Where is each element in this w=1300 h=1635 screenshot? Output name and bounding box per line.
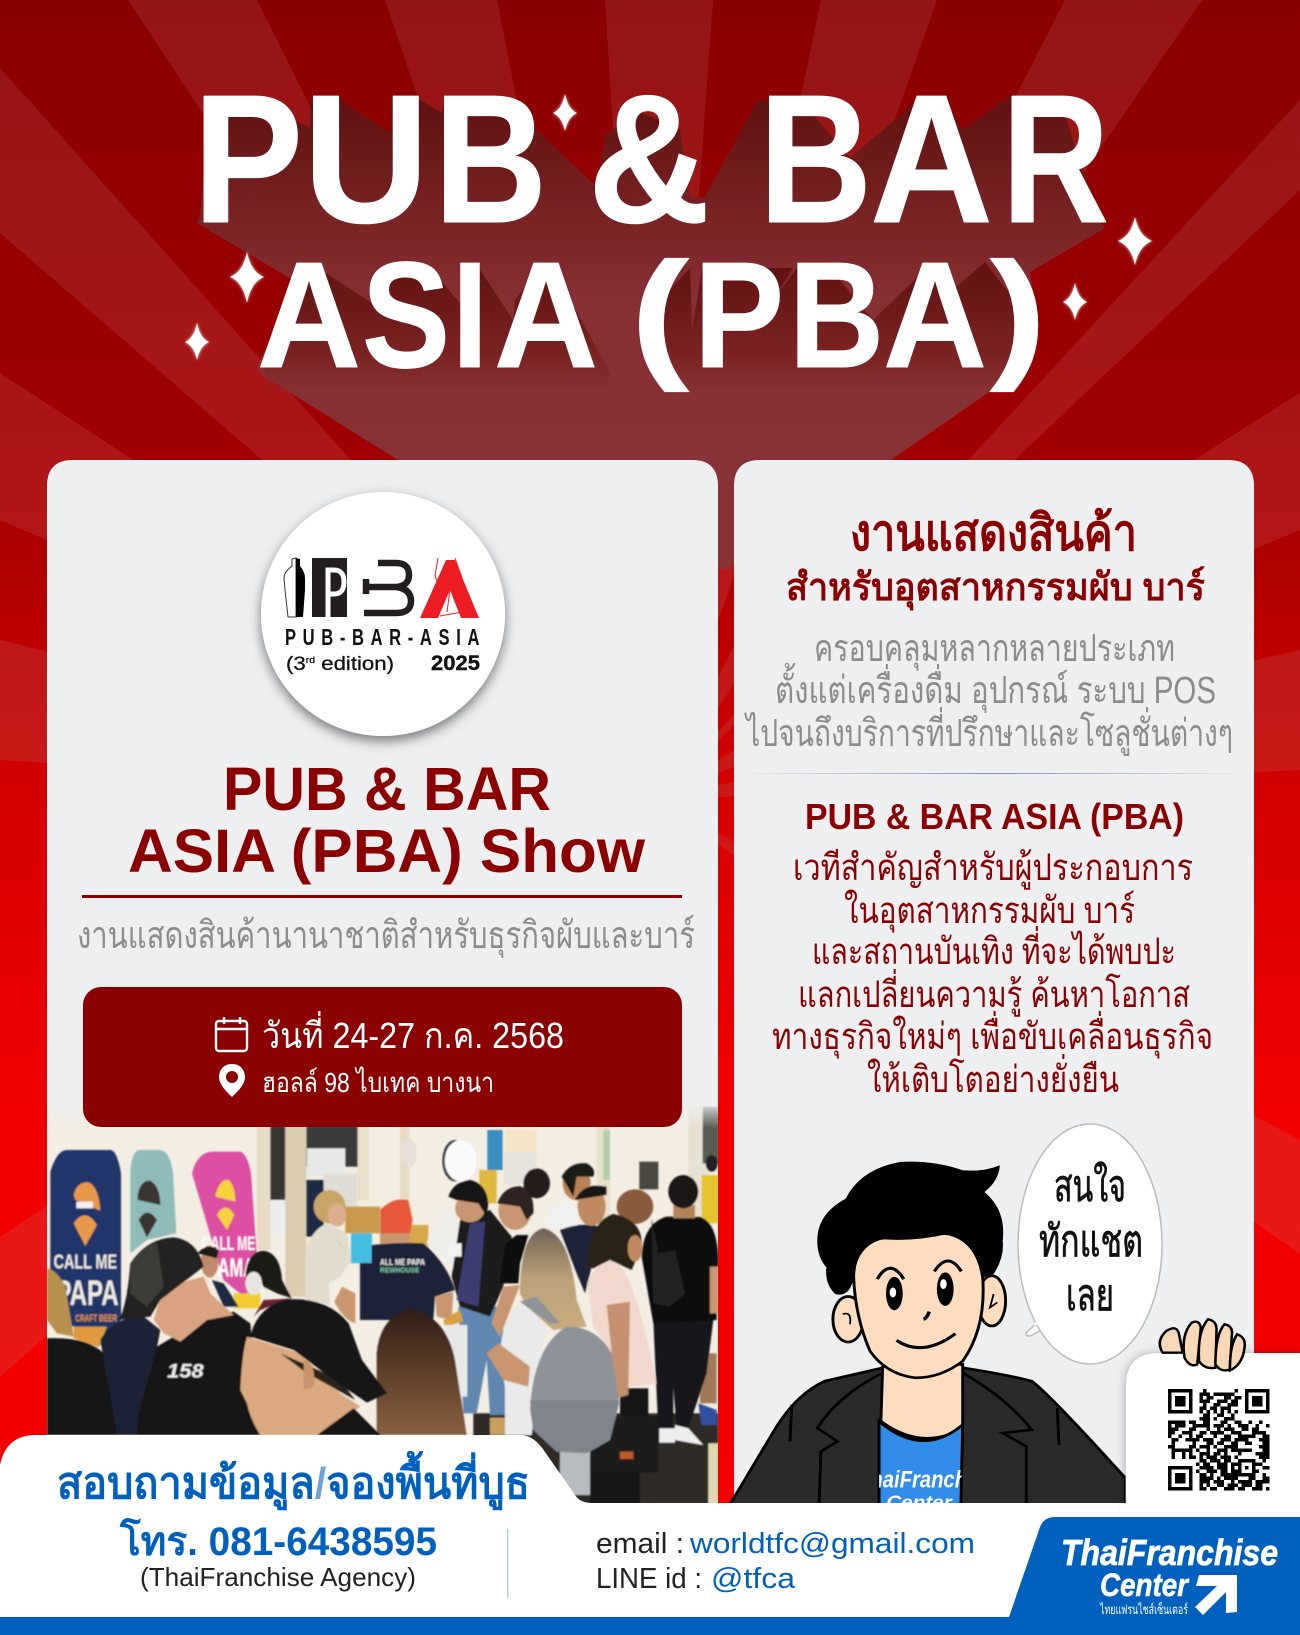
panel heading: งานแสดงสินค้า xyxy=(850,505,1137,561)
title line 1: P xyxy=(193,56,303,261)
LINE id xyxy=(596,1563,796,1595)
visitor in black cap, bowing: 158 xyxy=(167,1361,204,1382)
visitor in navy shirt xyxy=(334,1287,355,1323)
photo: crowd at show booth xyxy=(47,1100,719,1512)
logo Center: Center xyxy=(1100,1567,1189,1603)
front visitor in black cap xyxy=(240,1299,387,1435)
cartoon mascot: Center xyxy=(886,1492,953,1513)
date and venue box xyxy=(83,987,682,1127)
PBA subheading: PUB & BAR ASIA (PBA) xyxy=(805,796,1184,837)
venue: ฮอลล์ 98 ไบเทค บางนา xyxy=(262,1067,494,1098)
title line 2 xyxy=(257,230,1046,399)
title line 2: B xyxy=(789,230,884,399)
heading: PUB & BAR xyxy=(223,755,551,823)
logo wordmark: ThaiFranchise xyxy=(1061,1532,1278,1573)
title line 2: I xyxy=(452,230,488,399)
visitor in blazer xyxy=(305,1190,372,1305)
description text: และสถานบันเทิง ที่จะได้พบปะ xyxy=(812,925,1176,972)
sparkles xyxy=(185,94,1152,360)
left half of crowd xyxy=(47,1107,387,1435)
cartoon mascot: ThaiFranch xyxy=(858,1467,967,1493)
foreground left visitor xyxy=(47,1268,160,1435)
visitor in orange cap xyxy=(360,1199,455,1320)
logo: red A xyxy=(420,558,479,618)
title line 2: A xyxy=(883,230,987,399)
title line 1: & xyxy=(588,56,710,261)
logo edition: (3 xyxy=(286,654,303,675)
title line 2: ) xyxy=(990,234,1046,393)
beer can banners: CALL ME xyxy=(202,1234,255,1255)
icon: arrow xyxy=(1195,1575,1237,1615)
icon: calendar xyxy=(216,1017,247,1051)
event logo badge xyxy=(261,492,505,736)
heading: ASIA (PBA) Show xyxy=(128,817,646,885)
title line 2: A xyxy=(494,230,598,399)
QR code xyxy=(1168,1389,1270,1490)
icon: location pin xyxy=(219,1064,245,1097)
title line 1: A xyxy=(870,56,993,261)
visitor in orange cap: REWHOUSE xyxy=(380,1266,419,1275)
long-haired visitor xyxy=(377,1308,467,1435)
right half of crowd xyxy=(360,1107,719,1512)
coverage text xyxy=(744,628,1233,756)
bubble text: ทักแชต xyxy=(1039,1217,1143,1266)
title line 2: ( xyxy=(631,234,689,393)
visitors behind banner xyxy=(198,1246,292,1317)
ThaiFranchise Center logo xyxy=(1003,1517,1300,1635)
title line 2: A xyxy=(257,230,361,399)
bubble text xyxy=(1039,1161,1143,1320)
LINE id: LINE id : xyxy=(596,1563,702,1595)
logo edition: edition) xyxy=(315,654,394,675)
description text: ในอุตสาหกรรมผับ บาร์ xyxy=(844,889,1135,933)
logo: P block xyxy=(312,558,347,617)
description text: เวทีสำคัญสำหรับผู้ประกอบการ xyxy=(793,847,1193,890)
title line 2: P xyxy=(694,230,784,399)
panel heading xyxy=(786,505,1206,611)
logo: shaker xyxy=(284,558,305,617)
title line 1: R xyxy=(1002,56,1109,261)
title line 1: B xyxy=(759,56,872,261)
bubble text: สนใจ xyxy=(1054,1161,1126,1211)
logo wordmark: PUB-BAR-ASIA xyxy=(285,625,479,651)
beer can banners xyxy=(50,1150,260,1347)
visitor with backpack xyxy=(487,1228,619,1495)
beer can banners: CALL ME xyxy=(54,1250,117,1273)
email: email : xyxy=(596,1528,684,1560)
footer contact area xyxy=(0,1435,1300,1635)
title line 1: U xyxy=(303,56,429,261)
blue bottom band xyxy=(0,1617,1300,1635)
agency: (ThaiFranchise Agency) xyxy=(140,1562,416,1592)
QR card xyxy=(1120,1319,1300,1518)
visitor in black, right xyxy=(642,1175,718,1445)
panel heading: สำหรับอุตสาหกรรมผับ บาร์ xyxy=(786,566,1206,611)
bubble text: เลย xyxy=(1066,1271,1114,1320)
phone number: โทร. 081-6438595 xyxy=(119,1518,437,1564)
description text: ให้เติบโตอย่างยั่งยืน xyxy=(867,1053,1119,1100)
beer can banners: PAPA xyxy=(55,1274,119,1313)
title xyxy=(193,56,1109,399)
cartoon mascot xyxy=(730,1162,1126,1513)
booth wall xyxy=(47,1115,718,1435)
long shadow behind title xyxy=(197,96,1105,570)
photo top fade xyxy=(47,1105,718,1126)
panel: about the show xyxy=(734,460,1254,1504)
LINE id: @tfca xyxy=(711,1563,796,1595)
coverage text: ครอบคลุมหลากหลายประเภท xyxy=(814,628,1175,671)
title line 1 xyxy=(193,56,1109,261)
panel: event info xyxy=(47,460,718,1510)
email: worldtfc@gmail.com xyxy=(689,1528,975,1560)
logo: B mark xyxy=(364,563,411,613)
logo Thai name: ไทยแฟรนไชส์เซ็นเตอร์ xyxy=(1099,1600,1188,1617)
beer can banners: AMA xyxy=(218,1253,255,1283)
subheading: งานแสดงสินค้านานาชาติสำหรับธุรกิจผับและบาร์ xyxy=(77,914,695,958)
visitor in black jacket xyxy=(448,1180,533,1435)
description text: แลกเปลี่ยนความรู้ ค้นหาโอกาส xyxy=(798,968,1190,1017)
enquiry heading: สอบถามข้อมูล/จองพื้นที่บูธ xyxy=(57,1450,530,1510)
email xyxy=(596,1528,975,1560)
speech bubble xyxy=(1018,1124,1162,1364)
date: วันที่ 24-27 ก.ค. 2568 xyxy=(262,1011,564,1056)
logo year: 2025 xyxy=(431,652,480,675)
title line 2: S xyxy=(362,230,450,399)
title line 1: B xyxy=(434,56,547,261)
icon: hand holding card xyxy=(1160,1319,1245,1370)
logo edition: rd xyxy=(306,655,315,665)
heading xyxy=(128,755,646,885)
visitor in black cap, bowing xyxy=(119,1237,260,1435)
beer can banners: CRAFT BEER xyxy=(75,1314,117,1325)
description text xyxy=(772,847,1213,1100)
visitors at back xyxy=(410,1163,653,1293)
visitor in floral top xyxy=(587,1214,658,1512)
visitor in orange cap: ALL ME PAPA xyxy=(380,1257,426,1267)
